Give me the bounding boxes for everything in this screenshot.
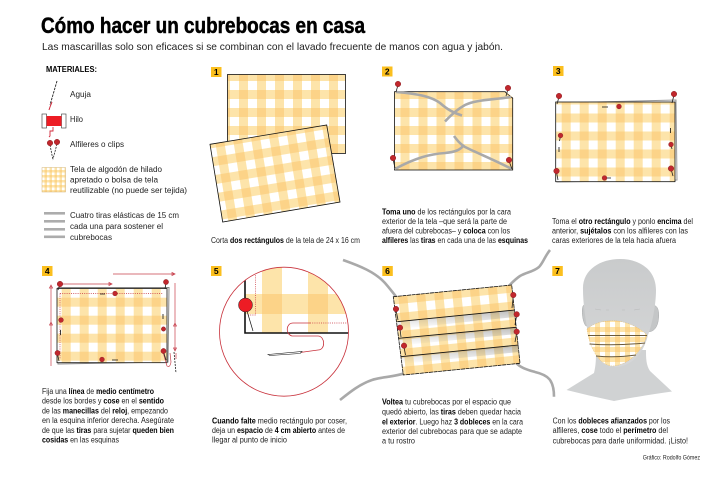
badge 5: [211, 266, 222, 276]
caption 2: [382, 208, 528, 245]
panel: paso 7: [552, 259, 688, 445]
fabric rectangle back: [228, 74, 346, 154]
label: tiras: Cuatro tiras elásticas de 15 cm: [70, 211, 179, 220]
label: tela: Tela de algodón de hilado: [70, 165, 163, 174]
badge 3: 3: [556, 66, 561, 76]
caption 3: caras exteriores de la tela hacia afuera: [552, 236, 676, 245]
head illustration: [566, 259, 672, 401]
caption 2: exterior de la tela –que será la parte de: [382, 217, 507, 226]
panel: paso 3: [552, 66, 693, 245]
icon: tiras: [44, 212, 65, 238]
caption 6: Voltea tu cubrebocas por el espacio que: [382, 398, 511, 407]
label: tiras: cada una para sostener el: [70, 222, 163, 231]
label: aguja: Aguja: [70, 90, 92, 99]
badge 6: [382, 266, 393, 276]
caption 4: Fija una línea de medio centímetro: [42, 387, 154, 396]
caption 5: Cuando falte medio rectángulo por coser,: [212, 417, 347, 426]
badge 7: [552, 266, 563, 276]
caption 5: deja un espacio de 4 cm abierto antes de: [212, 426, 345, 435]
caption 4: [42, 387, 174, 444]
badge 2: 2: [385, 66, 390, 76]
caption 7: [553, 417, 688, 445]
panel: paso 6: [340, 250, 554, 445]
icon: tela: [42, 168, 66, 192]
caption 4: desde los bordes y cose en el sentido: [42, 396, 164, 406]
icon: aguja: [49, 81, 57, 110]
panel: paso 5: [211, 266, 349, 444]
caption 7: alfileres, cose todo el perímetro del: [553, 426, 668, 435]
caption 3: anterior, sujétalos con los alfileres con las: [552, 226, 688, 236]
caption 2: alfileres las tiras en cada una de las esquinas: [382, 236, 528, 245]
caption 5: [212, 417, 347, 444]
icon: hilo: [42, 114, 66, 137]
icon: alfileres: [47, 139, 60, 160]
fabric rectangle front: [210, 125, 340, 222]
badge 1: 1: [214, 67, 219, 77]
pins: [390, 81, 512, 169]
panel: paso 2: [382, 66, 528, 245]
caption 4: cosidas en las esquinas: [42, 436, 119, 444]
caption 6: a tu rostro: [382, 436, 416, 445]
label: alfileres: Alfileres o clips: [70, 140, 124, 149]
magnified detail circle: [219, 267, 349, 397]
mask on face: [587, 321, 647, 366]
caption 6: quedó abierto, las tiras deben quedar hacia: [382, 407, 521, 416]
pins: [55, 279, 169, 362]
badge 5: 5: [214, 266, 219, 276]
badge 4: [42, 266, 52, 276]
badge 1: [211, 67, 222, 77]
elastic strips: [340, 250, 554, 400]
caption 3: [552, 217, 693, 245]
label: tiras: [70, 211, 179, 242]
caption 2: Toma uno de los rectángulos por la cara: [382, 208, 511, 216]
caption 6: el exterior. Luego haz 3 dobleces en la cara: [382, 417, 523, 426]
title: Cómo hacer un cubrebocas en casa: [41, 13, 366, 38]
caption 6: exterior del cubrebocas para que se adapte: [382, 427, 522, 436]
label: tiras: cubrebocas: [70, 233, 112, 242]
pleated mask: [393, 285, 520, 375]
caption 4: de las manecillas del reloj, empezando: [42, 406, 168, 416]
fabric with strips: [394, 91, 514, 170]
badge 4: 4: [45, 266, 50, 276]
label: hilo: Hilo: [70, 115, 84, 124]
pins: [393, 292, 520, 355]
caption 4: de que las tiras para sujetar queden bien: [42, 426, 174, 435]
badge 3: [553, 66, 564, 76]
badge 7: 7: [555, 266, 560, 276]
caption 2: afuera del cubrebocas– y coloca con los: [382, 226, 510, 236]
caption 6: [382, 398, 523, 445]
credit: Gráfico: Rodolfo Gómez: [643, 456, 700, 462]
label: tela: reutilizable (no puede ser tejida): [70, 186, 187, 195]
caption 5: llegar al punto de inicio: [212, 436, 287, 444]
label: tela: [70, 165, 187, 195]
caption 4: en la esquina inferior derecha. Asegúrate: [42, 416, 174, 425]
panel: paso 1: [210, 67, 360, 245]
caption 7: Con los dobleces afianzados por los: [553, 417, 670, 426]
fabric stacked: [556, 100, 677, 182]
panel: materiales: [42, 65, 187, 242]
caption 3: Toma el otro rectángulo y ponlo encima del: [552, 217, 693, 226]
caption 7: cubrebocas para darle uniformidad. ¡Listo!: [553, 436, 688, 445]
caption 1: Corta dos rectángulos de la tela de 24 x 16 cm: [211, 236, 360, 245]
pins: [554, 91, 677, 180]
badge 6: 6: [385, 266, 390, 276]
fabric with seam: [57, 288, 169, 364]
badge 2: [382, 66, 392, 76]
panel: paso 4: [42, 266, 176, 444]
label: tela: apretado o bolsa de tela: [70, 176, 159, 184]
sewing direction arrows: [49, 272, 176, 373]
heading: materiales: MATERIALES:: [46, 65, 97, 74]
subtitle: Las mascarillas solo son eficaces si se combinan con el lavado frecuente de manos con agua y jabón.: [42, 41, 503, 53]
